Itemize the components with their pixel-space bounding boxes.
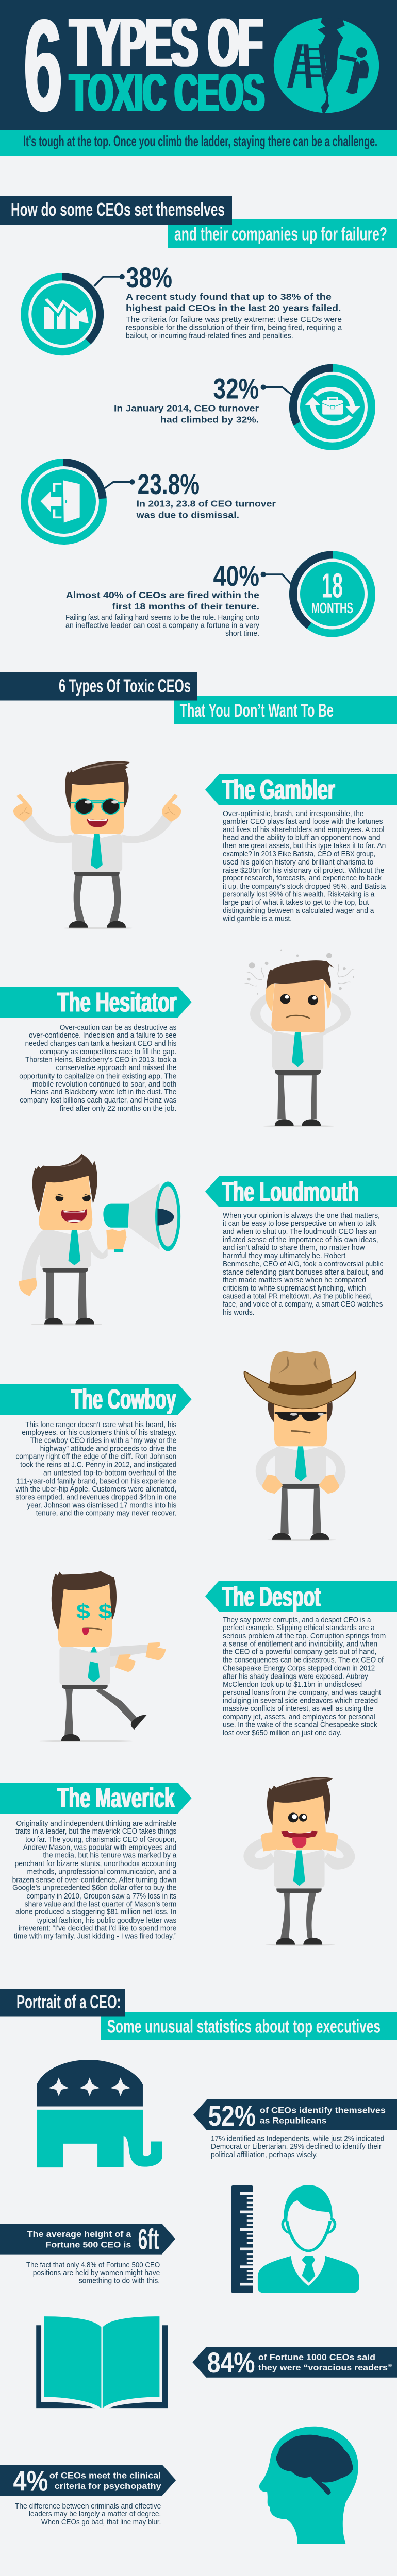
description: highway” attitude and proceeds to drive the xyxy=(40,1445,176,1453)
description: Google’s unprecedented $6bn dollar offer to buy the xyxy=(12,1884,176,1892)
ribbon: 52%: of CEOs identify themselves xyxy=(260,2106,386,2115)
description: stores emptied, and revenues dropped $4bn in one xyxy=(15,1494,176,1502)
description: Over-caution can be as destructive as xyxy=(60,1024,176,1032)
description: took the reins at J.C. Penny in 2012, and instigated xyxy=(20,1461,176,1469)
description: and lives of his shareholders and employees. A cool xyxy=(223,826,384,834)
description: company as competitors race to fill the gap. xyxy=(40,1048,176,1056)
ribbon heading xyxy=(0,1783,192,1814)
description: the CEO of a powerful company gets out of hand, xyxy=(223,1648,377,1656)
character: cowboy xyxy=(244,1351,356,1541)
description: harmful they may ultimately be. Robert xyxy=(223,1252,345,1260)
finding xyxy=(114,403,259,425)
description: used his golden history and brilliant charisma to xyxy=(223,858,373,867)
description: year. Johnson was dismissed 17 months into his xyxy=(27,1501,176,1510)
connector line xyxy=(94,274,125,286)
detail text xyxy=(26,2261,160,2285)
panel: the despot xyxy=(39,1571,397,1742)
ribbon: 6ft: 6ft xyxy=(138,2223,159,2256)
description: Over-optimistic, brash, and irresponsible, the xyxy=(223,810,364,818)
description xyxy=(12,1820,177,1941)
stat: 52% republicans xyxy=(37,2060,397,2167)
description: proper research, forecasts, and experience to back xyxy=(223,874,382,883)
description xyxy=(223,1212,383,1317)
character: despot with dollar eyes xyxy=(39,1571,166,1742)
description: the media, but his tenure was marked by a xyxy=(43,1852,177,1860)
description: time with my family. Just kidding - I was fired today.” xyxy=(14,1933,176,1941)
title line: toxic ceos: TOXIC CEOS xyxy=(70,63,264,122)
ribbon heading: The Maverick xyxy=(58,1783,175,1814)
finding: A recent study found that up to 38% of the xyxy=(126,292,332,302)
ribbon: 4% xyxy=(0,2464,176,2497)
character: despot with dollar eyes: $ xyxy=(76,1601,90,1623)
heading: portrait of a CEO: Portrait of a CEO: xyxy=(16,1991,121,2012)
number: 38% xyxy=(126,261,172,294)
description xyxy=(222,810,386,923)
description: serious problem at the top. Corruption springs from xyxy=(223,1632,386,1640)
description: use. In the wake of the scandal Chesapeake stock xyxy=(223,1721,377,1730)
description: When your opinion is always the one that matters, xyxy=(223,1212,380,1220)
ribbon: 6ft: The average height of a xyxy=(27,2230,131,2239)
description: perfect example. Slipping ethical standards are a xyxy=(223,1624,375,1632)
donut chart: 32 percent with briefcase icon xyxy=(293,368,371,446)
description: wild gamble is a must. xyxy=(222,915,292,923)
stat: 4% psychopathy xyxy=(0,2427,358,2544)
description: stance defending giant bonuses after a bailout, and xyxy=(223,1268,383,1277)
detail text: The difference between criminals and effective xyxy=(15,2502,161,2511)
description: mobile revolution continued to soar, and both xyxy=(32,1080,176,1089)
finding xyxy=(66,590,259,612)
description: personally lost 99% of his wealth. Risk-taking is a xyxy=(223,891,375,899)
ribbon: 4%: of CEOs meet the clinical xyxy=(49,2471,161,2480)
detail text: The criteria for failure was pretty extreme: these CEOs were xyxy=(126,316,342,324)
number: 32% xyxy=(213,372,259,404)
panel: the maverick xyxy=(0,1777,355,1946)
description: distinguishing between a calculated wager and a xyxy=(223,907,374,915)
donut chart: 23.8 percent with exit door icon xyxy=(25,463,103,541)
description: a sense of entitlement and invincibility, and when xyxy=(223,1640,377,1649)
description: fired after only 22 months on the job. xyxy=(60,1105,176,1113)
connector line xyxy=(104,479,135,488)
heading: how do some CEOs xyxy=(0,196,397,248)
stat: 32% xyxy=(114,368,371,446)
donut chart: 40 percent, 18 months xyxy=(293,555,371,633)
heading: how do some CEOs: How do some CEOs set themselves xyxy=(11,199,225,220)
ribbon heading: The Cowboy xyxy=(71,1384,176,1415)
ribbon heading xyxy=(0,1384,192,1415)
connector line xyxy=(261,384,291,394)
finding: In January 2014, CEO turnover xyxy=(114,403,259,413)
description: after his shady dealings were exposed. Aubrey xyxy=(223,1673,369,1681)
description: traits in a leader, but the maverick CEO takes things xyxy=(15,1827,176,1836)
ribbon: 52% xyxy=(193,2099,397,2132)
description: the consequences can be disastrous. The ex CEO of xyxy=(223,1656,384,1664)
description: lost over $650 million on just one day. xyxy=(223,1729,341,1737)
ribbon heading: The Gambler xyxy=(222,774,335,805)
detail text: something to do with this. xyxy=(79,2277,160,2285)
stat: 84% readers xyxy=(36,2316,397,2408)
description: gambler CEO plays fast and loose with the fortunes xyxy=(223,818,383,826)
description: and when to shut up. The loudmouth CEO has an xyxy=(223,1228,377,1236)
ribbon: 6ft: Fortune 500 CEO is xyxy=(45,2240,131,2249)
description: massive conflicts of interest, as well as using the xyxy=(223,1705,373,1713)
ribbon: 84%: they were “voracious readers” xyxy=(258,2363,392,2372)
description: Heins and Blackberry were left in the dust. The xyxy=(31,1088,176,1096)
description: company right off the edge of the cliff. Ron Johnson xyxy=(15,1453,176,1461)
ribbon heading xyxy=(0,987,192,1018)
donut chart: 38 percent with falling bars icon xyxy=(25,277,100,352)
ribbon heading: The Hesitator xyxy=(58,987,176,1018)
description: personal loans from the company, and was caught xyxy=(223,1689,381,1697)
icon: broken ladder emblem xyxy=(274,16,379,114)
finding: highest paid CEOs in the last 20 years failed. xyxy=(126,303,341,313)
ribbon heading: The Despot xyxy=(222,1581,321,1612)
detail text: short time. xyxy=(225,630,259,638)
description: Benmosche, CEO of AIG, took a controversial public xyxy=(223,1260,383,1268)
character: despot with dollar eyes: $ xyxy=(98,1601,112,1623)
description: typical fashion, his public goodbye letter was xyxy=(37,1917,176,1925)
description: share value and the last quarter of Mason’s term xyxy=(25,1901,176,1909)
description: head and the ability to bluff an opponent now and xyxy=(223,834,381,842)
description xyxy=(15,1421,176,1517)
description: Andrew Mason, was popular with employees and xyxy=(23,1844,176,1852)
description: This lone ranger doesn’t care what his board, his xyxy=(25,1421,176,1429)
detail text: an ineffective leader can cost a company a fortune in a very xyxy=(65,621,260,630)
description: McClendon took up to $1.1bn in undisclosed xyxy=(223,1681,362,1689)
finding: had climbed by 32%. xyxy=(160,414,259,425)
finding: was due to dismissal. xyxy=(136,510,239,520)
description: The cowboy CEO rides in with a “my way or the xyxy=(30,1437,176,1445)
ribbon: 4%: 4% xyxy=(13,2464,48,2497)
description: company jet, assets, and employees for personal xyxy=(223,1713,375,1721)
description: with the uber-hip Apple. Customers were alienated, xyxy=(15,1485,176,1494)
icon: head with brain xyxy=(259,2427,358,2544)
character: loudmouth with megaphone xyxy=(19,1154,180,1326)
description: methods, unprofessional communication, and a xyxy=(27,1868,177,1876)
description: and isn’t afraid to share them, no matter how xyxy=(223,1244,365,1252)
detail text xyxy=(126,316,342,340)
ribbon: 52%: 52% xyxy=(208,2099,256,2132)
donut chart: 40 percent, 18 months: MONTHS xyxy=(311,600,353,617)
description: then are great assets, but this type takes it to far. An xyxy=(223,842,386,850)
description: his words. xyxy=(223,1309,255,1317)
description: company in 2010, Groupon saw a 77% loss in its xyxy=(27,1892,176,1901)
donut chart: 40 percent, 18 months: 18 xyxy=(322,567,343,605)
detail text: When CEOs go bad, that line may blur. xyxy=(41,2518,161,2527)
detail text xyxy=(65,614,260,638)
panel: the hesitator xyxy=(0,950,354,1127)
panel: the loudmouth xyxy=(19,1154,397,1326)
description: large part of what it takes to get to the top, but xyxy=(223,899,369,907)
description: 111-year-old family brand, based on his experience xyxy=(16,1477,176,1485)
heading: 6 types of toxic CEOs xyxy=(0,672,397,724)
description: Thorsten Heins, Blackberry’s CEO in 2013, took a xyxy=(25,1056,177,1064)
description: an untested top-to-bottom overhaul of the xyxy=(43,1469,176,1478)
stat: 40% xyxy=(65,555,371,638)
description: company lost billions each quarter, and Heinz was xyxy=(20,1096,176,1105)
detail text: Democrat or Libertarian. 29% declined to identify their xyxy=(211,2143,382,2151)
description xyxy=(223,1616,386,1737)
description: opportunity to capitalize on their existing app. The xyxy=(19,1072,176,1080)
stat: 6ft height xyxy=(0,2185,359,2293)
heading: portrait of a CEO xyxy=(0,1989,397,2040)
description: it can be easy to lose perspective on when to talk xyxy=(223,1219,376,1228)
finding xyxy=(136,498,276,520)
description: tenure, and the company may never recover. xyxy=(36,1509,176,1517)
detail text: bailout, or incurring fraud-related fines and penalties. xyxy=(126,332,293,340)
description: over-confidence. Indecision and a failure to see xyxy=(29,1031,176,1040)
detail text: Failing fast and failing hard seems to be the rule. Hanging onto xyxy=(65,614,259,622)
description: irreverent: “I've decided that I'd like to spend more xyxy=(19,1925,176,1933)
detail text: leaders may be largely a matter of degree. xyxy=(29,2510,161,2518)
ribbon: 6ft xyxy=(0,2223,175,2256)
icon: elephant xyxy=(37,2060,162,2167)
heading: 6 types of toxic CEOs: 6 Types Of Toxic CEOs xyxy=(59,675,191,697)
description: inflated sense of the importance of his own ideas, xyxy=(223,1236,378,1244)
detail text xyxy=(211,2135,384,2159)
description: Originality and independent thinking are admirable xyxy=(16,1820,176,1828)
stat: 23.8% xyxy=(25,463,276,541)
header panel xyxy=(0,0,397,139)
character: gambler xyxy=(13,761,181,929)
description: criticism to white supremacist lynching, which xyxy=(223,1284,366,1293)
finding: Almost 40% of CEOs are fired within the xyxy=(66,590,259,600)
description: Chesapeake Energy Corps stepped down in 2012 xyxy=(223,1665,375,1673)
description xyxy=(19,1024,177,1113)
detail text: political affiliation, perhaps wisely. xyxy=(211,2151,318,2159)
finding xyxy=(126,292,341,313)
character: maverick xyxy=(243,1777,355,1946)
ribbon: 84%: of Fortune 1000 CEOs said xyxy=(258,2353,375,2362)
ribbon: 84%: 84% xyxy=(207,2346,255,2379)
tagline band xyxy=(0,130,397,156)
stat: 38% xyxy=(25,261,342,352)
description: brazen sense of over-confidence. After turning down xyxy=(12,1876,176,1885)
description: employees, or his customers think of his strategy. xyxy=(22,1429,176,1437)
finding: In 2013, 23.8 of CEO turnover xyxy=(137,498,276,509)
description: They say power corrupts, and a despot CEO is a xyxy=(223,1616,371,1624)
description: alone produced a staggering $81 million net loss. In xyxy=(15,1908,176,1917)
panel: the gambler xyxy=(13,761,397,929)
description: example? In 2013 Eike Batista, CEO of EBX group, xyxy=(223,850,375,858)
panel: the cowboy xyxy=(0,1351,356,1541)
ribbon: 84% xyxy=(192,2346,397,2379)
icon: open book xyxy=(36,2316,168,2408)
description: raise $20bn for his visionary oil project. Without the xyxy=(223,867,384,875)
detail text: responsible for the dissolution of their firm, being fired, requiring a xyxy=(126,324,342,332)
description: too far. The young, charismatic CEO of Groupon, xyxy=(25,1836,176,1844)
number: 23.8% xyxy=(138,468,200,500)
ribbon: 52%: as Republicans xyxy=(260,2116,326,2125)
detail text: positions are held by women might have xyxy=(33,2269,160,2277)
detail text: 17% identified as Independents, while just 2% indicated xyxy=(211,2135,384,2143)
ribbon: 4%: criteria for psychopathy xyxy=(55,2482,162,2491)
description: needed changes can tank a hesitant CEO and his xyxy=(25,1040,176,1048)
finding: first 18 months of their tenure. xyxy=(112,601,259,612)
icon: ruler and executive xyxy=(231,2185,359,2293)
character: hesitator xyxy=(244,950,354,1127)
detail text xyxy=(15,2502,161,2527)
description: conservative approach and missed the xyxy=(56,1064,176,1072)
description: indulging in several side endeavors which created xyxy=(223,1697,378,1705)
description: caused a total PR meltdown. As the public head, xyxy=(223,1293,373,1301)
description: penchant for bizarre stunts, unorthodox accounting xyxy=(14,1860,176,1868)
detail text: The fact that only 4.8% of Fortune 500 CEO xyxy=(26,2261,160,2269)
description: it up, the company’s stock dropped 95%, and Batista xyxy=(223,883,386,891)
connector line xyxy=(261,572,291,584)
number: 40% xyxy=(213,560,259,592)
description: then made matters worse when he compared xyxy=(223,1276,366,1284)
description: face, and voice of a company, a smart CEO watches xyxy=(223,1300,383,1309)
